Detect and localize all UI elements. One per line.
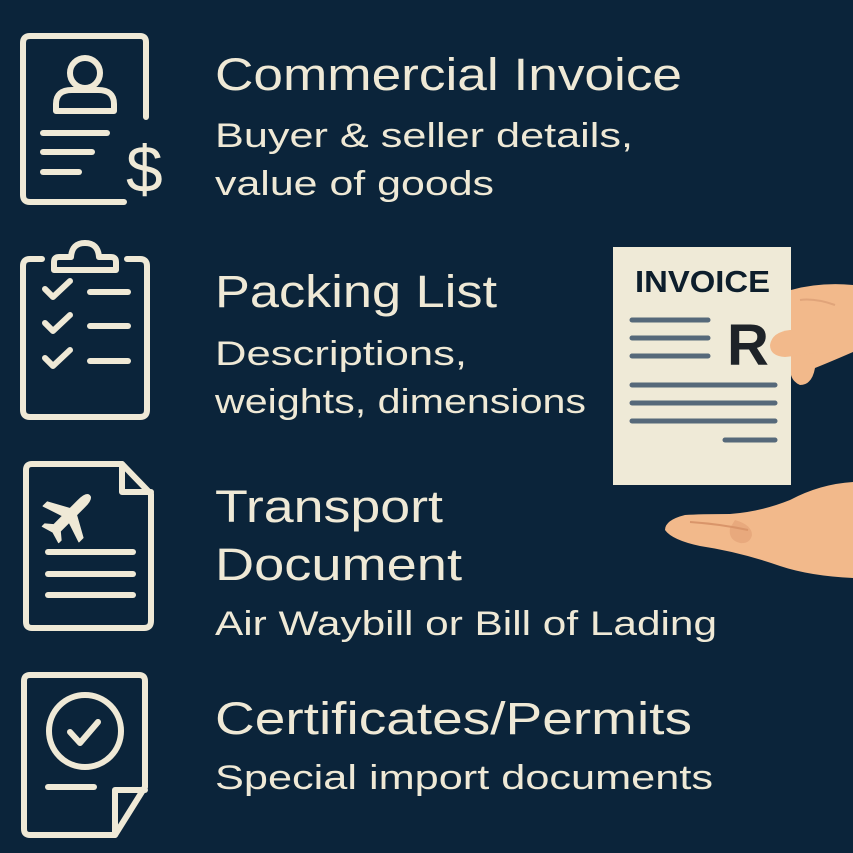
icon: packing list clipboard bbox=[23, 243, 147, 417]
text: commercial invoice: Buyer & seller details, bbox=[215, 117, 633, 155]
illustration: invoice with hands: R bbox=[727, 313, 769, 378]
icon: commercial invoice bbox=[23, 36, 163, 206]
text: packing list: Packing List bbox=[215, 266, 498, 317]
icon: transport document bbox=[26, 464, 151, 628]
text: transport document: Air Waybill or Bill of Lading bbox=[215, 605, 717, 643]
text: packing list: Descriptions, bbox=[215, 335, 467, 373]
text: packing list bbox=[214, 266, 586, 421]
text: packing list: weights, dimensions bbox=[214, 383, 586, 421]
text: certificates bbox=[215, 693, 713, 797]
text: transport document: Document bbox=[215, 539, 463, 590]
text: transport document: Transport bbox=[215, 481, 444, 532]
text: commercial invoice bbox=[215, 49, 682, 203]
icon: commercial invoice: $ bbox=[126, 132, 163, 206]
text: commercial invoice: Commercial Invoice bbox=[215, 49, 682, 100]
text: certificates: Special import documents bbox=[215, 759, 713, 797]
illustration: invoice with hands bbox=[613, 247, 853, 578]
text: certificates: Certificates/Permits bbox=[215, 693, 692, 744]
text: commercial invoice: value of goods bbox=[215, 165, 494, 203]
icon: certificates bbox=[24, 675, 145, 835]
illustration: invoice with hands: INVOICE bbox=[635, 264, 770, 299]
text: transport document bbox=[215, 481, 717, 643]
